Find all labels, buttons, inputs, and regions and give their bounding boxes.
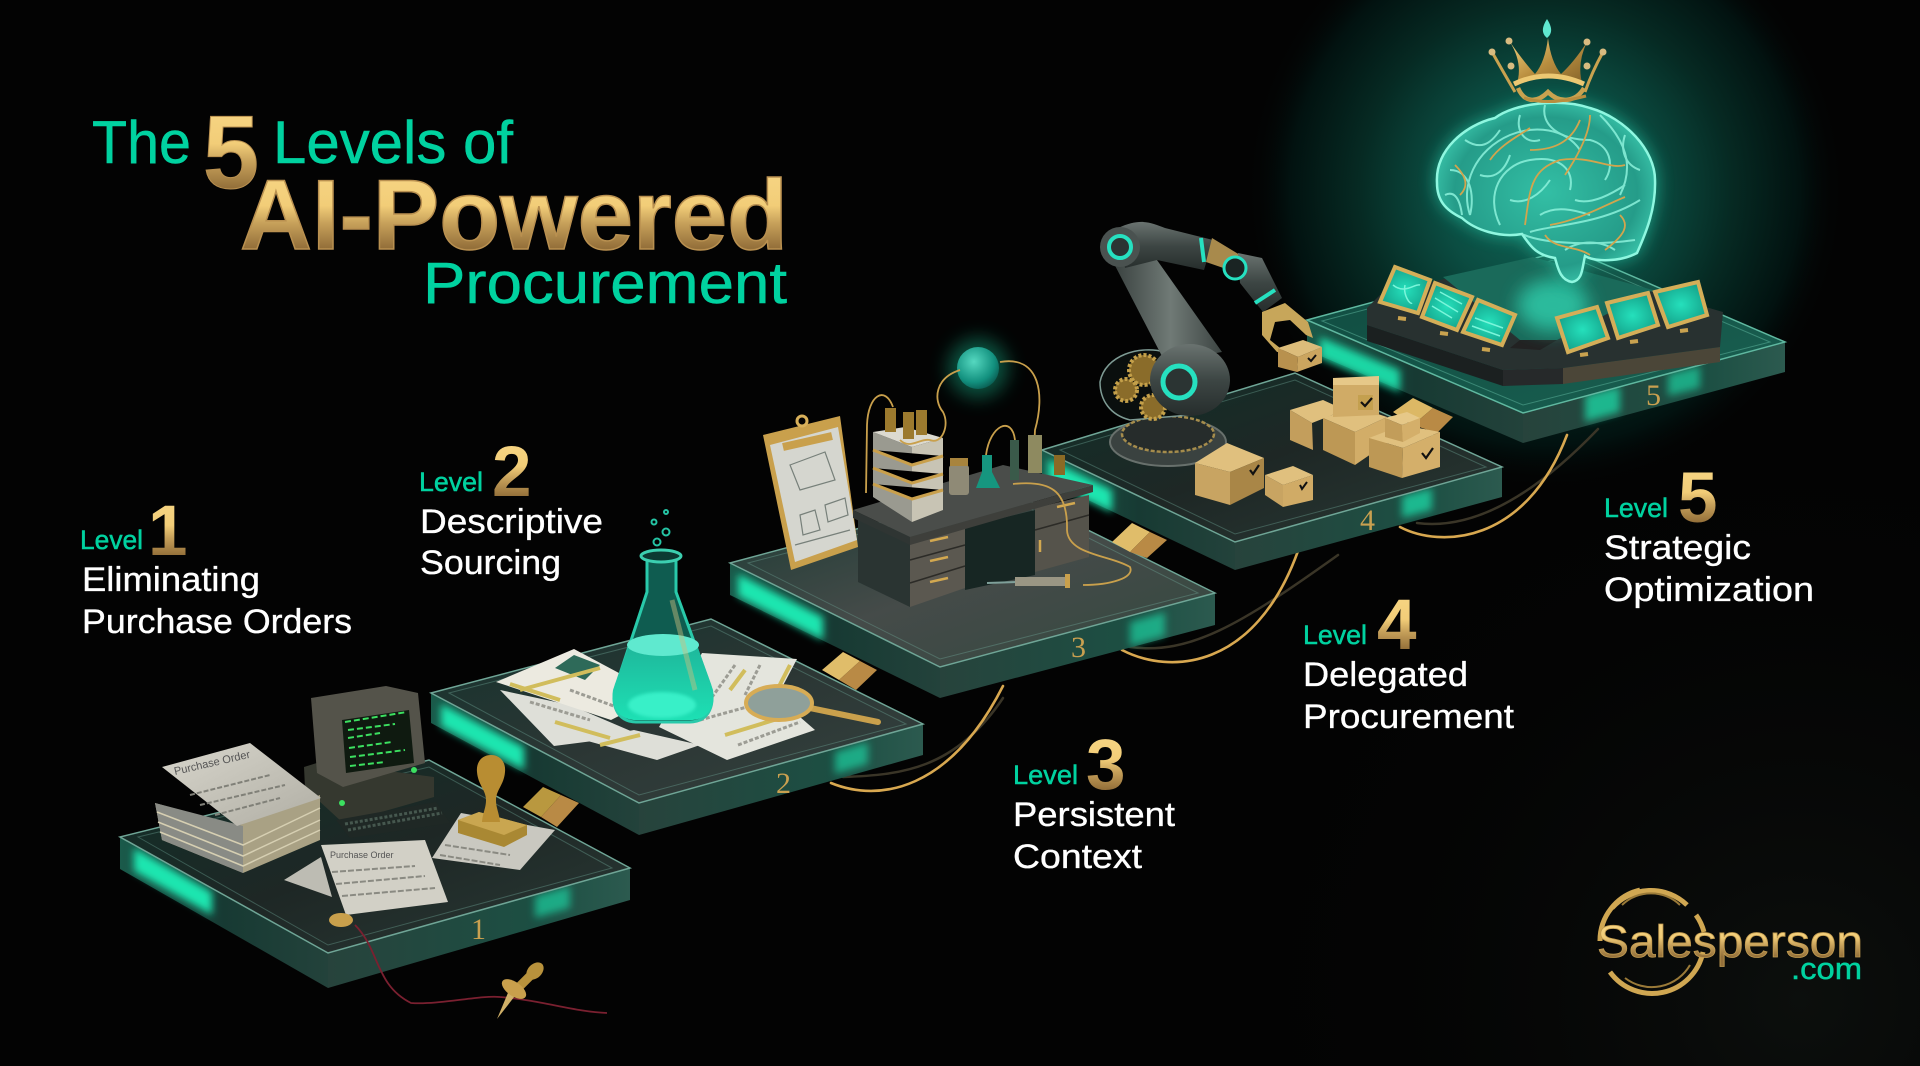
logo: Salesperson.com: Salesperson xyxy=(1597,916,1863,967)
number 1: 1 xyxy=(471,913,486,946)
connecting cables xyxy=(831,429,1598,791)
label: level 3: Persistent xyxy=(1013,796,1176,834)
number 5: 5 xyxy=(1646,379,1661,412)
paper stack: Purchase Order xyxy=(173,749,252,778)
title xyxy=(92,95,788,316)
label: level 5: Level xyxy=(1604,493,1668,523)
label: level 3: Level xyxy=(1013,760,1078,790)
platform level 1 xyxy=(120,686,630,1019)
number 4: 4 xyxy=(1360,504,1375,537)
logo: Salesperson.com xyxy=(1597,890,1863,993)
label: level 5: Optimization xyxy=(1604,571,1814,609)
held box xyxy=(1278,340,1322,372)
crumpled purchase orders: Purchase Order xyxy=(330,850,394,860)
label: level 2 xyxy=(419,433,603,582)
crumpled purchase orders xyxy=(284,813,555,915)
label: level 2: Sourcing xyxy=(420,544,561,582)
title: The xyxy=(92,109,191,176)
label: level 2: Level xyxy=(419,467,483,497)
clipboard xyxy=(763,416,858,570)
label: level 1: Level xyxy=(80,525,143,555)
magnifying glass xyxy=(746,686,878,722)
label: level 2: 2 xyxy=(492,433,532,512)
label: level 4 xyxy=(1303,586,1515,736)
label: level 5: Strategic xyxy=(1604,529,1751,567)
gold connector 4-5 xyxy=(1393,398,1453,433)
screens xyxy=(1380,267,1707,355)
pedestal xyxy=(1367,257,1723,386)
desktop glassware xyxy=(949,435,1065,495)
logo: Salesperson.com: .com xyxy=(1791,951,1862,986)
glass slab 4 xyxy=(1042,373,1502,570)
gold connector 2-3 xyxy=(822,652,877,690)
cardboard boxes xyxy=(1195,376,1440,507)
label: level 1 xyxy=(80,492,352,641)
label: level 4: Procurement xyxy=(1303,698,1515,736)
label: level 5 xyxy=(1604,459,1814,609)
glass slab 3 xyxy=(730,489,1215,698)
rubber stamp xyxy=(458,755,527,847)
label: level 4: Level xyxy=(1303,620,1367,650)
label: level 1: Eliminating xyxy=(82,561,260,599)
lab desk xyxy=(853,465,1093,607)
label: level 5: 5 xyxy=(1678,459,1718,538)
gold connector 1-2 xyxy=(523,787,579,827)
title: 5 xyxy=(203,95,259,211)
glowing sphere and tubes xyxy=(866,338,1131,585)
title: Levels of xyxy=(273,109,513,176)
platform level 3 xyxy=(730,338,1215,698)
retro computer xyxy=(304,686,450,838)
research papers xyxy=(496,649,815,760)
erlenmeyer flask xyxy=(613,510,713,722)
label: level 1: 1 xyxy=(148,492,188,571)
number 2: 2 xyxy=(776,767,791,800)
crown xyxy=(1488,19,1606,102)
label: level 1: Purchase Orders xyxy=(82,603,352,641)
number 3: 3 xyxy=(1071,631,1086,664)
brain hologram xyxy=(1437,103,1655,282)
title: AI-Powered xyxy=(240,159,788,270)
platform level 5 xyxy=(1307,19,1785,443)
gold connector 3-4 xyxy=(1112,523,1167,558)
label: level 3 xyxy=(1013,726,1176,876)
glass slab 2 xyxy=(431,619,923,835)
platform level 4 xyxy=(1042,222,1502,570)
label: level 2: Descriptive xyxy=(420,503,603,541)
paper stack xyxy=(155,743,321,873)
robot arm xyxy=(1100,222,1313,466)
instrument stack and bottles xyxy=(873,408,943,522)
label: level 3: 3 xyxy=(1086,726,1126,805)
syringe xyxy=(987,574,1070,588)
platform level 2 xyxy=(431,510,923,835)
label: level 4: Delegated xyxy=(1303,656,1468,694)
label: level 4: 4 xyxy=(1377,586,1417,665)
label: level 3: Context xyxy=(1013,838,1143,876)
glass slab 1 xyxy=(120,760,630,988)
wire and pushpin xyxy=(329,913,607,1019)
glass slab 5 xyxy=(1307,249,1785,443)
title: Procurement xyxy=(423,251,787,316)
